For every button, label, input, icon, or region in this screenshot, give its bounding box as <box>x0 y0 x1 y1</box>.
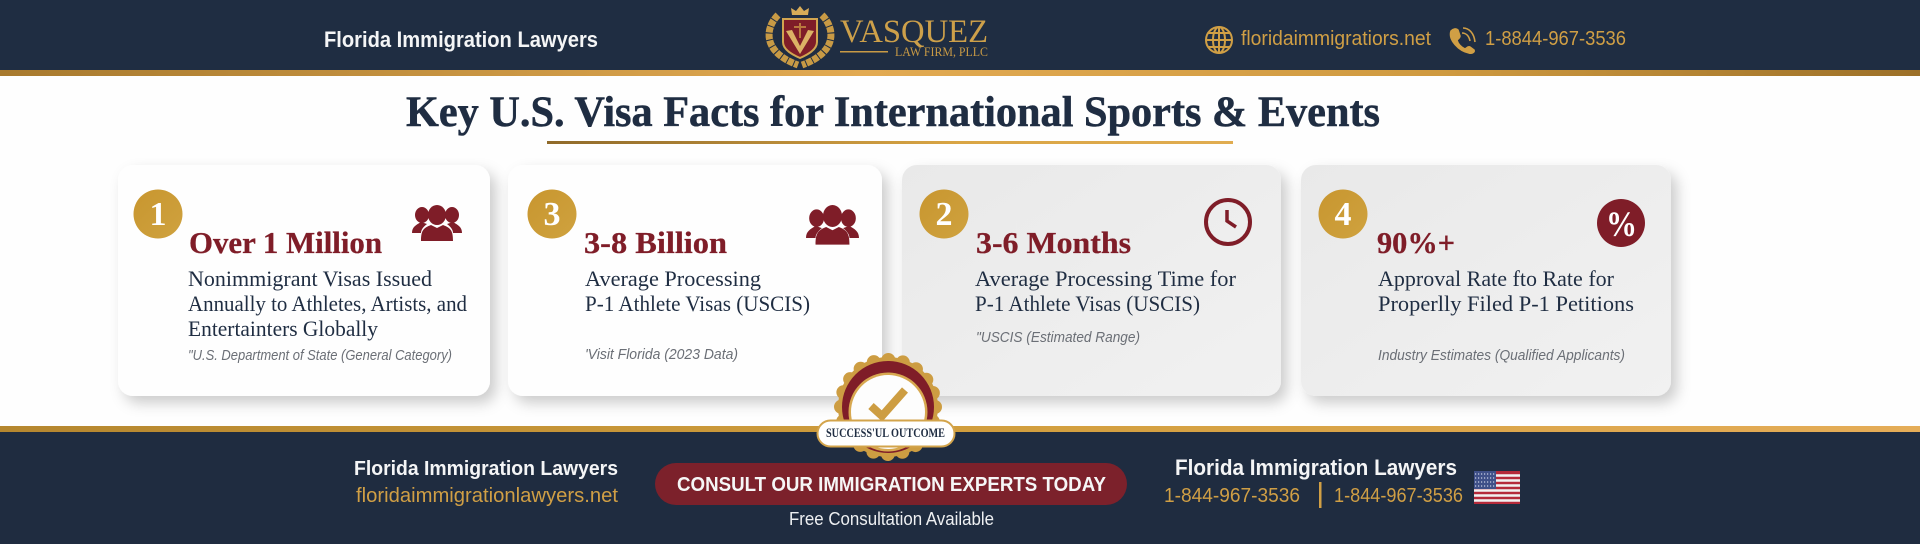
panel: 90%+ <box>1301 165 1671 396</box>
title: Key U.S. Visa Facts for International Sports & Events <box>406 89 1380 136</box>
description: Entertainters Globally <box>188 316 378 341</box>
number badge 4: 4 <box>1334 196 1352 233</box>
stat: 3-6 Months <box>976 225 1131 260</box>
number badge 2 <box>920 190 968 238</box>
footer contact block: 1-844-967-3536 <box>1164 485 1300 507</box>
description: P-1 Athlete Visas (USCIS) <box>585 291 810 316</box>
icon: percent <box>1597 199 1645 247</box>
number badge 1: 1 <box>150 196 166 233</box>
header band <box>0 0 1920 76</box>
call to action button: CONSULT OUR IMMIGRATION EXPERTS TODAY <box>677 474 1107 496</box>
source note: "U.S. Department of State (General Category) <box>188 347 452 364</box>
footer firm name and website: floridaimmigrationlawyers.net <box>356 485 618 507</box>
icon: percent: % <box>1606 204 1637 244</box>
source note: 'Visit Florida (2023 Data) <box>585 346 738 363</box>
number badge 1 <box>134 190 182 238</box>
icon: people <box>412 205 462 241</box>
footer contact block <box>1164 455 1463 508</box>
title underline <box>547 141 1233 144</box>
logo: Vasquez Law Firm: VASQUEZ <box>840 14 988 50</box>
description: Average Processing Time for <box>975 266 1237 291</box>
panel: 3-6 months <box>902 165 1281 396</box>
panel: 3-8 billion <box>508 165 882 396</box>
icon: check mark <box>871 390 905 416</box>
description: Properlly Filed P-1 Petitions <box>1378 291 1634 316</box>
page background <box>0 76 1920 426</box>
icon: US flag <box>1474 471 1520 504</box>
description <box>975 266 1237 316</box>
call to action button <box>655 463 1127 505</box>
number badge 2: 2 <box>936 196 952 233</box>
description: Approval Rate fto Rate for <box>1378 266 1615 291</box>
icon: clock <box>1206 200 1250 244</box>
logo: Vasquez Law Firm: LAW FIRM, PLLC <box>895 44 988 59</box>
number badge 4 <box>1318 190 1368 238</box>
description <box>1378 266 1634 316</box>
header phone number: 1-8844-967-3536 <box>1485 28 1626 50</box>
footer firm name and website <box>354 458 618 507</box>
badge: successful outcome <box>818 357 954 457</box>
icon: people <box>806 205 859 245</box>
number badge 3 <box>528 190 576 238</box>
footer contact block: 1-844-967-3536 <box>1334 485 1463 507</box>
logo: Vasquez Law Firm <box>769 6 988 65</box>
badge ribbon: SUCCESS'UL OUTCOME <box>826 426 945 440</box>
stat: 3-8 Billion <box>584 225 727 260</box>
free consultation note: Free Consultation Available <box>789 509 994 529</box>
panel: over 1 million <box>118 165 490 396</box>
header website: floridaimmigratiors.net <box>1241 28 1431 50</box>
icon: phone <box>1450 28 1475 53</box>
icon: globe <box>1206 27 1232 53</box>
description: Average Processing <box>585 266 761 291</box>
header firm name: Florida Immigration Lawyers <box>324 27 598 52</box>
footer contact block: Florida Immigration Lawyers <box>1175 455 1457 480</box>
description <box>188 266 467 341</box>
footer band <box>0 426 1920 544</box>
stat: Over 1 Million <box>189 225 382 260</box>
source note: Industry Estimates (Qualified Applicants) <box>1378 347 1625 364</box>
icon: crest with laurel wreath <box>769 6 831 65</box>
description: Annually to Athletes, Artists, and <box>188 291 467 316</box>
number badge 3: 3 <box>544 196 560 233</box>
footer firm name and website: Florida Immigration Lawyers <box>354 458 618 480</box>
source note: "USCIS (Estimated Range) <box>976 329 1140 346</box>
description: Nonimmigrant Visas Issued <box>188 266 432 291</box>
stat: 90%+ <box>1377 225 1455 260</box>
description <box>585 266 810 316</box>
description: P-1 Athlete Visas (USCIS) <box>975 291 1200 316</box>
